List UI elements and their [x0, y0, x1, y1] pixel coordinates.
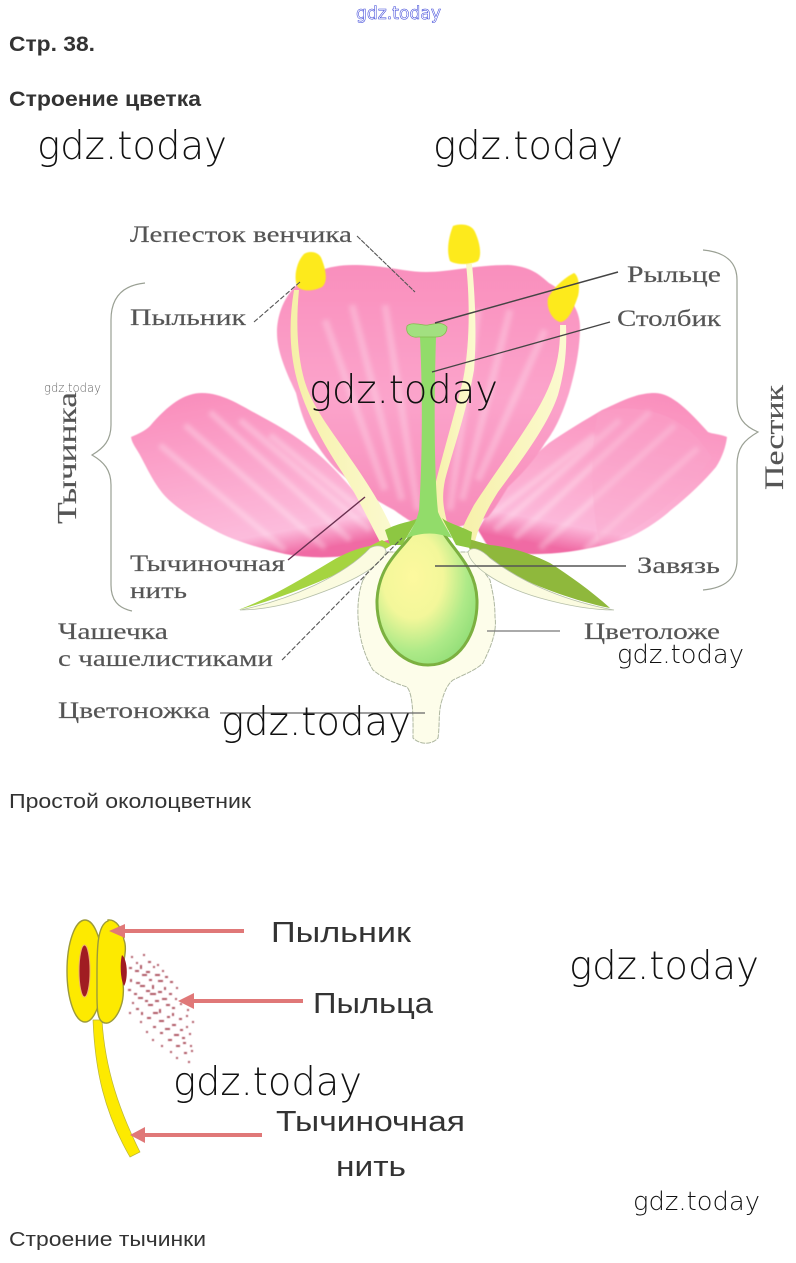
watermarks: gdz.today [44, 381, 101, 395]
stamen: left filament [291, 290, 396, 542]
label: calyx second line: с чашелистиками [58, 646, 273, 671]
caption: stamen structure: Строение тычинки [9, 1229, 206, 1251]
label: stigma: Рыльце [627, 262, 721, 287]
label: filament second line: нить [130, 578, 187, 603]
label: calyx: Чашечка [58, 619, 168, 644]
label: anther: Пыльник [130, 305, 247, 330]
anther: right pollen sac [121, 955, 127, 986]
watermarks: gdz.today [433, 124, 623, 169]
site watermark: top: gdz.today [356, 3, 441, 24]
sepal: left [238, 540, 392, 610]
watermarks: gdz.today [309, 368, 498, 413]
stamen: middle filament [433, 264, 475, 530]
diagram: flower structure [52, 222, 789, 743]
stamen: middle anther [448, 224, 480, 264]
filament [93, 1020, 140, 1157]
watermarks: gdz.today [633, 1187, 760, 1217]
label: receptacle: Цветоложе [584, 619, 720, 644]
anther: right lobe [97, 920, 125, 1023]
pistil: ovary [377, 527, 477, 665]
anther: left pollen sac [79, 945, 90, 997]
receptacle and pedicel outline [358, 552, 495, 743]
petal: left [131, 393, 395, 557]
watermarks: gdz.today [617, 640, 744, 670]
sepal: right [465, 538, 610, 608]
sepal: left inner [240, 546, 386, 610]
label: pistil (vertical): Пестик [760, 385, 789, 490]
label: pedicel: Цветоножка [58, 698, 210, 723]
pistil: style [406, 337, 452, 538]
heading: flower structure: Строение цветка [9, 88, 201, 111]
stamen: left anther [296, 252, 326, 290]
brace: stamen (left) [92, 283, 145, 611]
arrow: filament [130, 1127, 262, 1143]
sepal: right inner [468, 549, 614, 610]
heading: page number: Стр. 38. [9, 33, 95, 56]
watermarks [37, 124, 760, 1217]
pistil: stigma [407, 323, 447, 337]
petal: central [277, 265, 580, 530]
watermarks: gdz.today [37, 124, 227, 169]
label: ovary: Завязь [637, 553, 720, 578]
pistil: ovary base collar [385, 518, 472, 548]
leader lines [220, 236, 626, 713]
label: petal: Лепесток венчика [130, 222, 352, 247]
watermarks: gdz.today [221, 700, 411, 745]
watermarks: gdz.today [173, 1060, 362, 1105]
pollen cloud [128, 955, 194, 1062]
watermarks: gdz.today [569, 944, 759, 989]
arrow: pollen [178, 993, 303, 1009]
label: filament second line: нить [336, 1151, 406, 1183]
stamen: right anther [548, 273, 579, 322]
label: pollen: Пыльца [313, 988, 434, 1020]
stamen: right filament [458, 325, 566, 546]
label: anther: Пыльник [271, 917, 411, 949]
anther: left lobe [67, 920, 103, 1022]
diagram: stamen structure [67, 917, 465, 1183]
label: style: Столбик [617, 306, 722, 331]
brace: pistil (right) [703, 250, 758, 590]
arrow: anther [109, 924, 244, 938]
label: filament: Тычиночная [276, 1106, 465, 1138]
label: stamen (vertical): Тычинка [52, 392, 82, 524]
caption: simple perianth: Простой околоцветник [9, 791, 251, 813]
label: filament: Тычиночная [130, 551, 286, 576]
petal: right [478, 393, 727, 554]
